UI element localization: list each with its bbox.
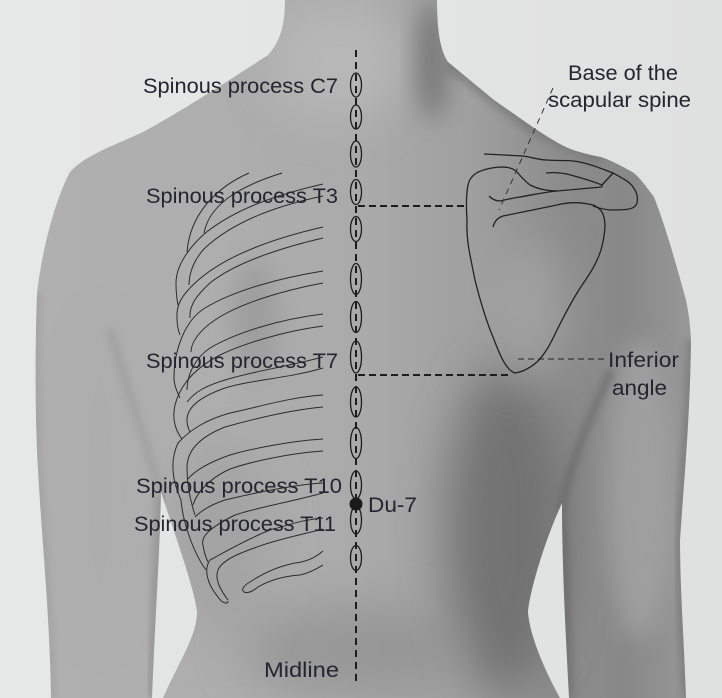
rib cage outline (173, 173, 323, 603)
label: spinous process T10: Spinous process T10 (136, 475, 342, 498)
gap between left arm and torso (152, 492, 197, 698)
label: base of the scapular spine (548, 62, 691, 112)
leader line: base of scapular spine (499, 88, 553, 210)
label: spinous process T7: Spinous process T7 (146, 350, 338, 373)
label: inferior angle (608, 349, 679, 400)
label: spinous process T11: Spinous process T11 (134, 513, 336, 536)
leader line: inferior angle (518, 358, 607, 360)
midline dashed line (355, 50, 357, 686)
label: base of the scapular spine: scapular spine (548, 89, 691, 112)
gap between right arm and torso (528, 503, 569, 698)
T7 level dashed line (358, 374, 512, 376)
label: inferior angle: angle (612, 377, 667, 400)
label: spinous process T3: Spinous process T3 (146, 185, 338, 208)
label: spinous process C7: Spinous process C7 (143, 75, 338, 98)
label: Du-7: Du-7 (368, 494, 417, 517)
spinous process markers (350, 73, 362, 570)
label: midline: Midline (264, 659, 339, 682)
scapula outline (466, 154, 637, 373)
label: inferior angle: Inferior (608, 349, 679, 372)
label: base of the scapular spine: Base of the (568, 62, 678, 85)
T3 level dashed line (358, 205, 467, 207)
Du-7 acupoint dot (350, 498, 362, 510)
